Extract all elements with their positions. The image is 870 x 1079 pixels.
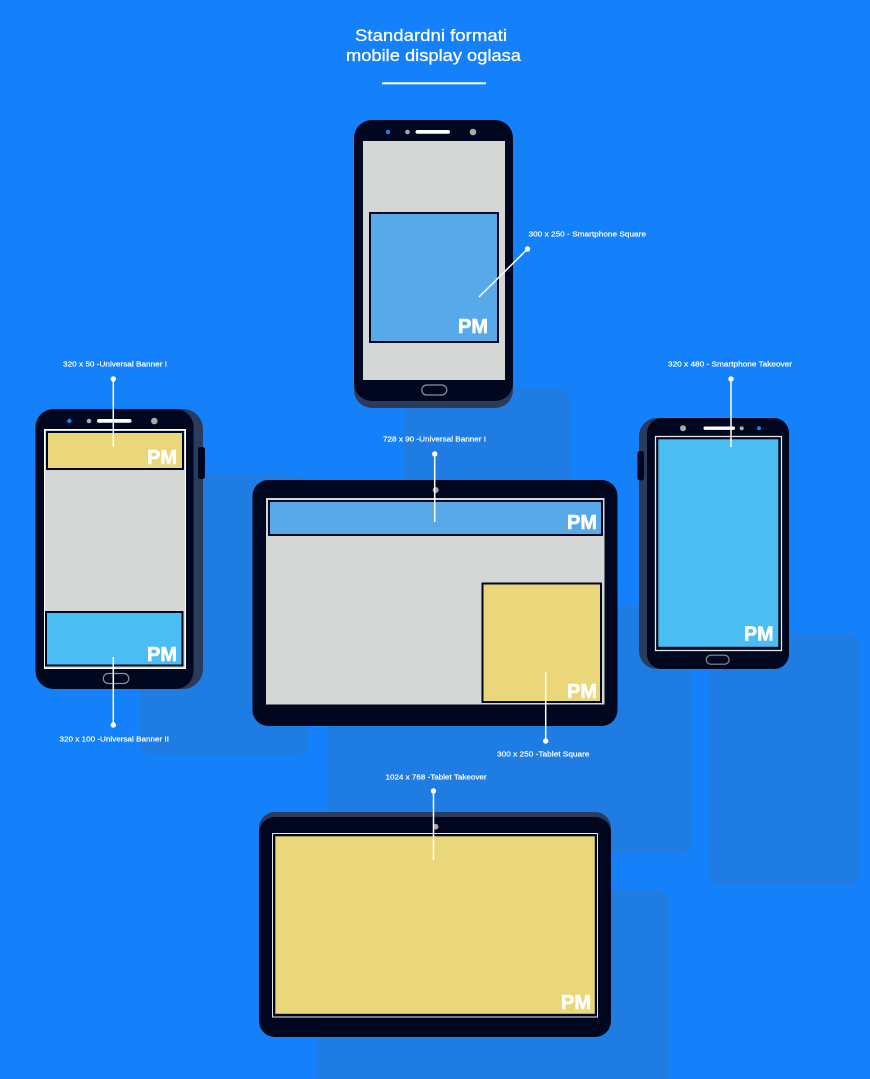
ad banner 300x250 (370, 213, 498, 342)
phone: smartphone square (354, 120, 513, 408)
tablet screen (272, 834, 598, 1017)
home button (103, 674, 129, 684)
phone sensors (680, 425, 761, 431)
callout: 320 x 50 Universal Banner I: 320 x 50 -Universal Banner I (63, 360, 167, 369)
callout: 1024 x 768 Tablet Takeover (386, 773, 487, 860)
ad 1024x768 (275, 836, 595, 1014)
callout: 320 x 100 Universal Banner II: 320 x 100 -Universal Banner II (60, 735, 169, 744)
phone: smartphone takeover (638, 418, 789, 669)
phone side edge (639, 418, 699, 669)
ad square 300x250 (482, 584, 601, 702)
side button (198, 447, 205, 479)
PM logo: PM (744, 624, 774, 646)
PM logo: PM (567, 512, 597, 534)
PM logo: PM (561, 992, 591, 1014)
callout: 300 x 250 Smartphone Square (479, 230, 646, 297)
callout: 320 x 50 Universal Banner I (63, 360, 167, 447)
callout: 320 x 100 Universal Banner II (60, 657, 169, 744)
title: Standardni formati (355, 27, 507, 45)
tablet screen (266, 498, 604, 704)
ad banner 320x100 (46, 612, 182, 666)
tablet shadow edge (259, 812, 611, 912)
ad 320x480 (658, 439, 778, 647)
PM logo: PM (147, 644, 177, 666)
camera (433, 824, 439, 830)
camera (433, 487, 439, 493)
title (346, 27, 522, 65)
home button (422, 385, 447, 395)
tablet body (259, 817, 611, 1037)
callout: 300 x 250 Smartphone Square: 300 x 250 - Smartphone Square (528, 230, 646, 239)
home button (706, 655, 729, 664)
phone body (354, 120, 513, 401)
phone side edge (120, 409, 203, 689)
tablet: banner and square (252, 480, 618, 726)
callout: 320 x 480 Smartphone Takeover: 320 x 480 - Smartphone Takeover (668, 360, 793, 369)
phone shadow edge (354, 127, 513, 408)
callout: 1024 x 768 Tablet Takeover: 1024 x 768 -Tablet Takeover (386, 773, 487, 782)
phone screen (44, 430, 186, 668)
phone screen (656, 436, 782, 650)
phone body (647, 418, 789, 669)
phone sensors (386, 129, 476, 135)
phone body (36, 409, 194, 689)
callout: 728 x 90 Universal Banner I (383, 435, 486, 522)
tablet body (252, 480, 618, 726)
tablet: takeover (259, 812, 611, 1037)
callout: 728 x 90 Universal Banner I: 728 x 90 -Universal Banner I (383, 435, 486, 444)
title: mobile display oglasa (346, 47, 522, 65)
ad banner 728x90 (269, 501, 602, 535)
phone: universal banners (36, 409, 205, 689)
callout: 300 x 250 Tablet Square: 300 x 250 -Tablet Square (497, 750, 590, 759)
callout: 320 x 480 Smartphone Takeover (668, 360, 793, 447)
PM logo: PM (458, 316, 488, 338)
side button (638, 451, 644, 480)
ad banner 320x50 (47, 432, 183, 469)
PM logo: PM (567, 681, 597, 703)
PM logo: PM (147, 447, 177, 469)
phone sensors (67, 418, 158, 424)
phone screen (363, 141, 505, 380)
callout: 300 x 250 Tablet Square (497, 672, 590, 759)
